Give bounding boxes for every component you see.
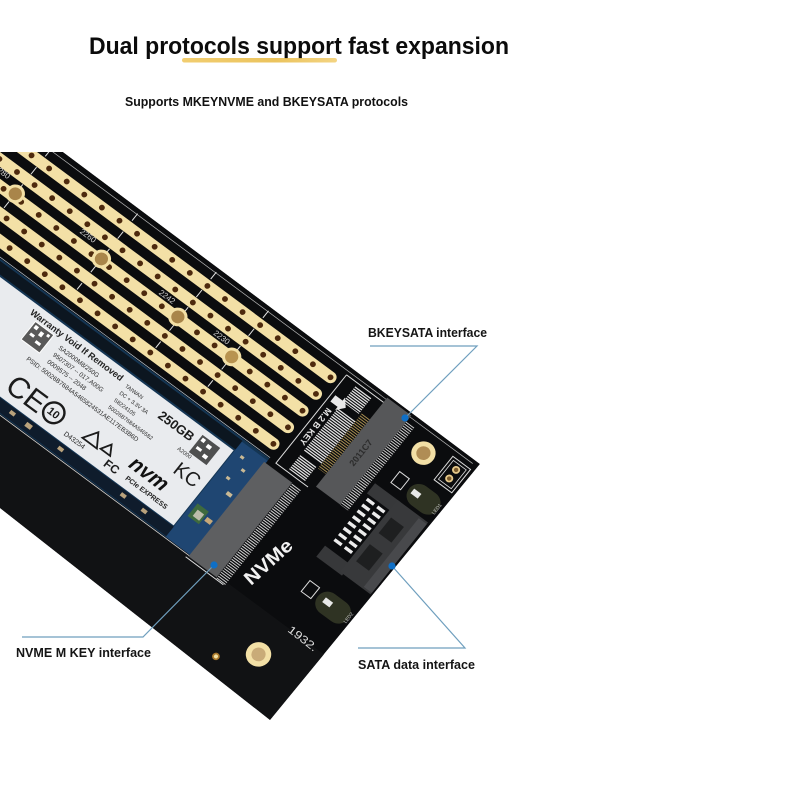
CE mark: CE bbox=[0, 369, 53, 420]
size labels: 2260 bbox=[78, 227, 98, 245]
LED one label: LED1 bbox=[431, 503, 444, 516]
callout: BKEYSATA bbox=[368, 326, 487, 422]
M key connector pins bbox=[220, 487, 296, 582]
label text: Warranty Void If Removed bbox=[28, 308, 125, 383]
NVMe silk text: NVMe bbox=[240, 535, 297, 590]
callout: BKEYSATA: BKEYSATA interface bbox=[368, 326, 487, 340]
PCIe mark: PCIe EXPRESS bbox=[124, 475, 169, 511]
recycle 10 mark: 10 bbox=[44, 405, 62, 422]
B key arrow bbox=[330, 395, 346, 410]
callout: NVME M KEY bbox=[16, 561, 218, 660]
SSD small capacitors bbox=[8, 410, 148, 515]
board base bbox=[0, 152, 480, 720]
size labels: 2230 bbox=[212, 329, 232, 347]
title: Dual protocols support fast expansion bbox=[89, 33, 509, 60]
label text: DC + 3.3V 3A bbox=[118, 391, 149, 416]
triangle marks bbox=[80, 430, 113, 458]
SSD white label bbox=[0, 277, 234, 526]
size labels bbox=[0, 163, 233, 347]
QR code one bbox=[20, 321, 55, 354]
callout: SATA data: SATA data interface bbox=[358, 658, 475, 672]
nvm express logo: nvm bbox=[124, 452, 173, 496]
SATA connector housing bbox=[340, 500, 428, 594]
callout: NVME M KEY: NVME M KEY interface bbox=[16, 646, 151, 660]
SSD controller area bbox=[166, 442, 268, 556]
length tick marks bbox=[0, 149, 269, 387]
B key striped pads bbox=[289, 386, 364, 476]
QR code two bbox=[189, 435, 220, 465]
SATA LED pad one bbox=[387, 468, 446, 519]
edge silk line bbox=[52, 152, 473, 464]
date code silk text: 1932. bbox=[285, 624, 319, 654]
B key pad traces bbox=[322, 417, 366, 471]
LED two label: LED2 bbox=[343, 611, 355, 625]
RoHS text: D43254 bbox=[62, 431, 86, 451]
label text: 0009575 -- 2048 bbox=[45, 359, 88, 392]
SATA pins bbox=[335, 500, 382, 554]
capacity label: 250GB bbox=[155, 408, 198, 444]
label text bbox=[26, 308, 153, 441]
gold screw strips bbox=[0, 152, 337, 450]
size labels: 2242 bbox=[157, 288, 177, 306]
power header bbox=[434, 456, 471, 493]
lower board surface bbox=[0, 508, 324, 720]
SATA LED pad two bbox=[297, 577, 356, 628]
SATA side tabs bbox=[316, 483, 401, 576]
B key connector bbox=[316, 398, 411, 505]
SSD lower chip row bbox=[0, 398, 174, 536]
subtitle: Supports MKEYNVME and BKEYSATA protocols bbox=[125, 95, 408, 109]
label text: 50026B7684A546582 bbox=[106, 405, 154, 442]
M key connector outline bbox=[186, 557, 223, 585]
SSD circuit board bbox=[0, 258, 270, 555]
label text: TAIWAN bbox=[123, 384, 144, 401]
M key connector bbox=[188, 462, 292, 577]
label text: S8224105 bbox=[112, 398, 136, 418]
right mounting hole bbox=[406, 437, 441, 470]
small via bbox=[211, 651, 221, 662]
label text: PSID: 50026B7684A5465824531AE117EB3B6D bbox=[25, 356, 140, 444]
SSD bottom edge trace bbox=[0, 414, 190, 556]
B key label: M.2 B KEY bbox=[297, 406, 334, 447]
recycle 10 mark bbox=[42, 401, 66, 424]
adapter board photo bbox=[0, 152, 480, 720]
label text: SA2000M8/250G bbox=[57, 345, 100, 379]
B key connector pins bbox=[344, 425, 410, 508]
SSD top edge trace bbox=[0, 256, 270, 458]
label text: 9507307 -- 017.A00G bbox=[51, 352, 105, 394]
KC mark: KC bbox=[169, 459, 205, 492]
standoff holes bbox=[0, 181, 246, 370]
SSD dark memory chips bbox=[0, 261, 242, 450]
small model text: A2000 bbox=[176, 446, 192, 461]
infographic canvas bbox=[0, 36, 508, 720]
FCC mark: FC bbox=[101, 457, 123, 477]
strip via holes bbox=[0, 152, 334, 447]
B key footprint outline bbox=[275, 374, 384, 488]
connector marking: 2011C7 bbox=[347, 438, 375, 468]
title highlight underline bbox=[182, 58, 337, 62]
lower right mounting hole bbox=[241, 637, 276, 672]
callout: SATA data bbox=[358, 562, 475, 672]
